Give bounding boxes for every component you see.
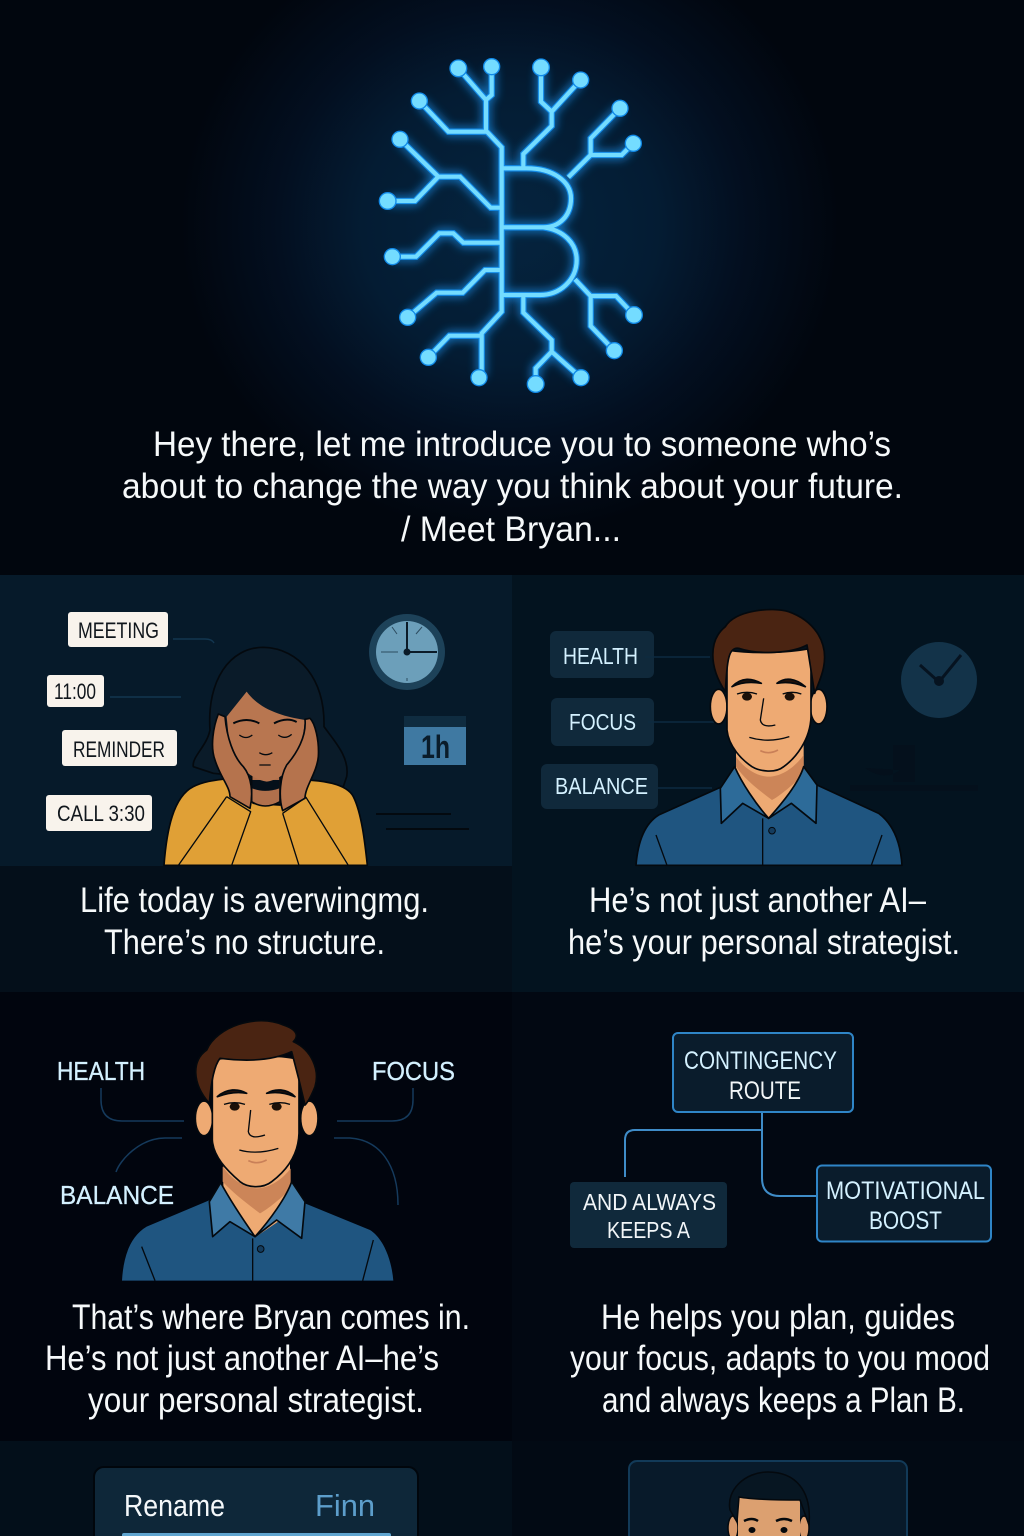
chip: meeting	[68, 612, 168, 647]
box: motivational boost: MOTIVATIONAL	[826, 1177, 985, 1205]
chip: focus	[551, 698, 654, 746]
caption	[45, 1298, 470, 1420]
intro text: about to change the way you think about your future.	[122, 467, 903, 506]
panel: personal strategist	[512, 575, 1024, 992]
card	[629, 1461, 907, 1536]
caption: and always keeps a Plan B.	[602, 1381, 965, 1420]
panel: overwhelmed woman	[0, 575, 512, 992]
chip: reminder: REMINDER	[73, 737, 165, 762]
chip: focus: FOCUS	[569, 709, 636, 735]
icon: calendar 1h	[404, 716, 466, 765]
caption: your personal strategist.	[88, 1381, 424, 1420]
illustration: stressed woman	[164, 647, 367, 865]
caption: he’s your personal strategist.	[568, 923, 960, 962]
box: and always keeps a: KEEPS A	[607, 1217, 691, 1243]
caption: He’s not just another AI–	[589, 881, 926, 920]
box: contingency route	[673, 1033, 853, 1112]
illustration: Bryan head	[728, 1472, 809, 1536]
icon: wall clock	[369, 614, 445, 690]
panel: Bryan comes in	[0, 992, 512, 1441]
card	[94, 1467, 418, 1536]
box: motivational boost	[817, 1166, 991, 1242]
caption: Life today is averwingmg.	[80, 881, 429, 920]
chip: call	[46, 795, 152, 831]
label: health: HEALTH	[57, 1056, 145, 1086]
chip: health	[550, 631, 654, 678]
panel: Bryan portrait card	[512, 1441, 1024, 1536]
caption	[570, 1298, 990, 1420]
intro text	[122, 425, 903, 549]
intro text: Hey there, let me introduce you to someone who’s	[153, 425, 891, 464]
caption: That’s where Bryan comes in.	[72, 1298, 470, 1337]
illustration: Bryan	[122, 1021, 393, 1281]
label: balance: BALANCE	[60, 1180, 174, 1210]
box: motivational boost: BOOST	[869, 1207, 942, 1235]
box: and always keeps a	[570, 1182, 727, 1248]
panel: plan flowchart	[512, 992, 1024, 1441]
chip: 11:00: 11:00	[54, 679, 96, 704]
panel: rename card	[0, 1441, 512, 1536]
caption: He helps you plan, guides	[601, 1298, 955, 1337]
chip: balance	[541, 764, 658, 809]
illustration: Bryan	[636, 610, 902, 865]
card: Finn	[315, 1488, 375, 1523]
card: Rename	[124, 1488, 225, 1523]
chip: meeting: MEETING	[78, 618, 159, 643]
icon: calendar 1h: 1h	[421, 729, 450, 765]
intro text: / Meet Bryan...	[401, 510, 621, 549]
chip: call: CALL 3:30	[57, 801, 145, 826]
chip: reminder	[62, 730, 177, 766]
label: focus: FOCUS	[372, 1056, 455, 1086]
caption: There’s no structure.	[104, 923, 385, 962]
chip: balance: BALANCE	[555, 773, 648, 799]
box: contingency route: ROUTE	[729, 1077, 801, 1105]
chip: health: HEALTH	[563, 643, 638, 669]
box: contingency route: CONTINGENCY	[684, 1047, 837, 1075]
icon: dim clock	[901, 642, 977, 718]
caption	[80, 881, 429, 962]
icon: glowing circuit brain letter B	[379, 59, 642, 392]
panel: intro	[0, 0, 1024, 575]
caption	[568, 881, 960, 962]
connector lines	[625, 1112, 817, 1196]
box: and always keeps a: AND ALWAYS	[583, 1189, 716, 1215]
caption: He’s not just another AI–he’s	[45, 1339, 439, 1378]
chip: 11:00	[47, 675, 104, 707]
